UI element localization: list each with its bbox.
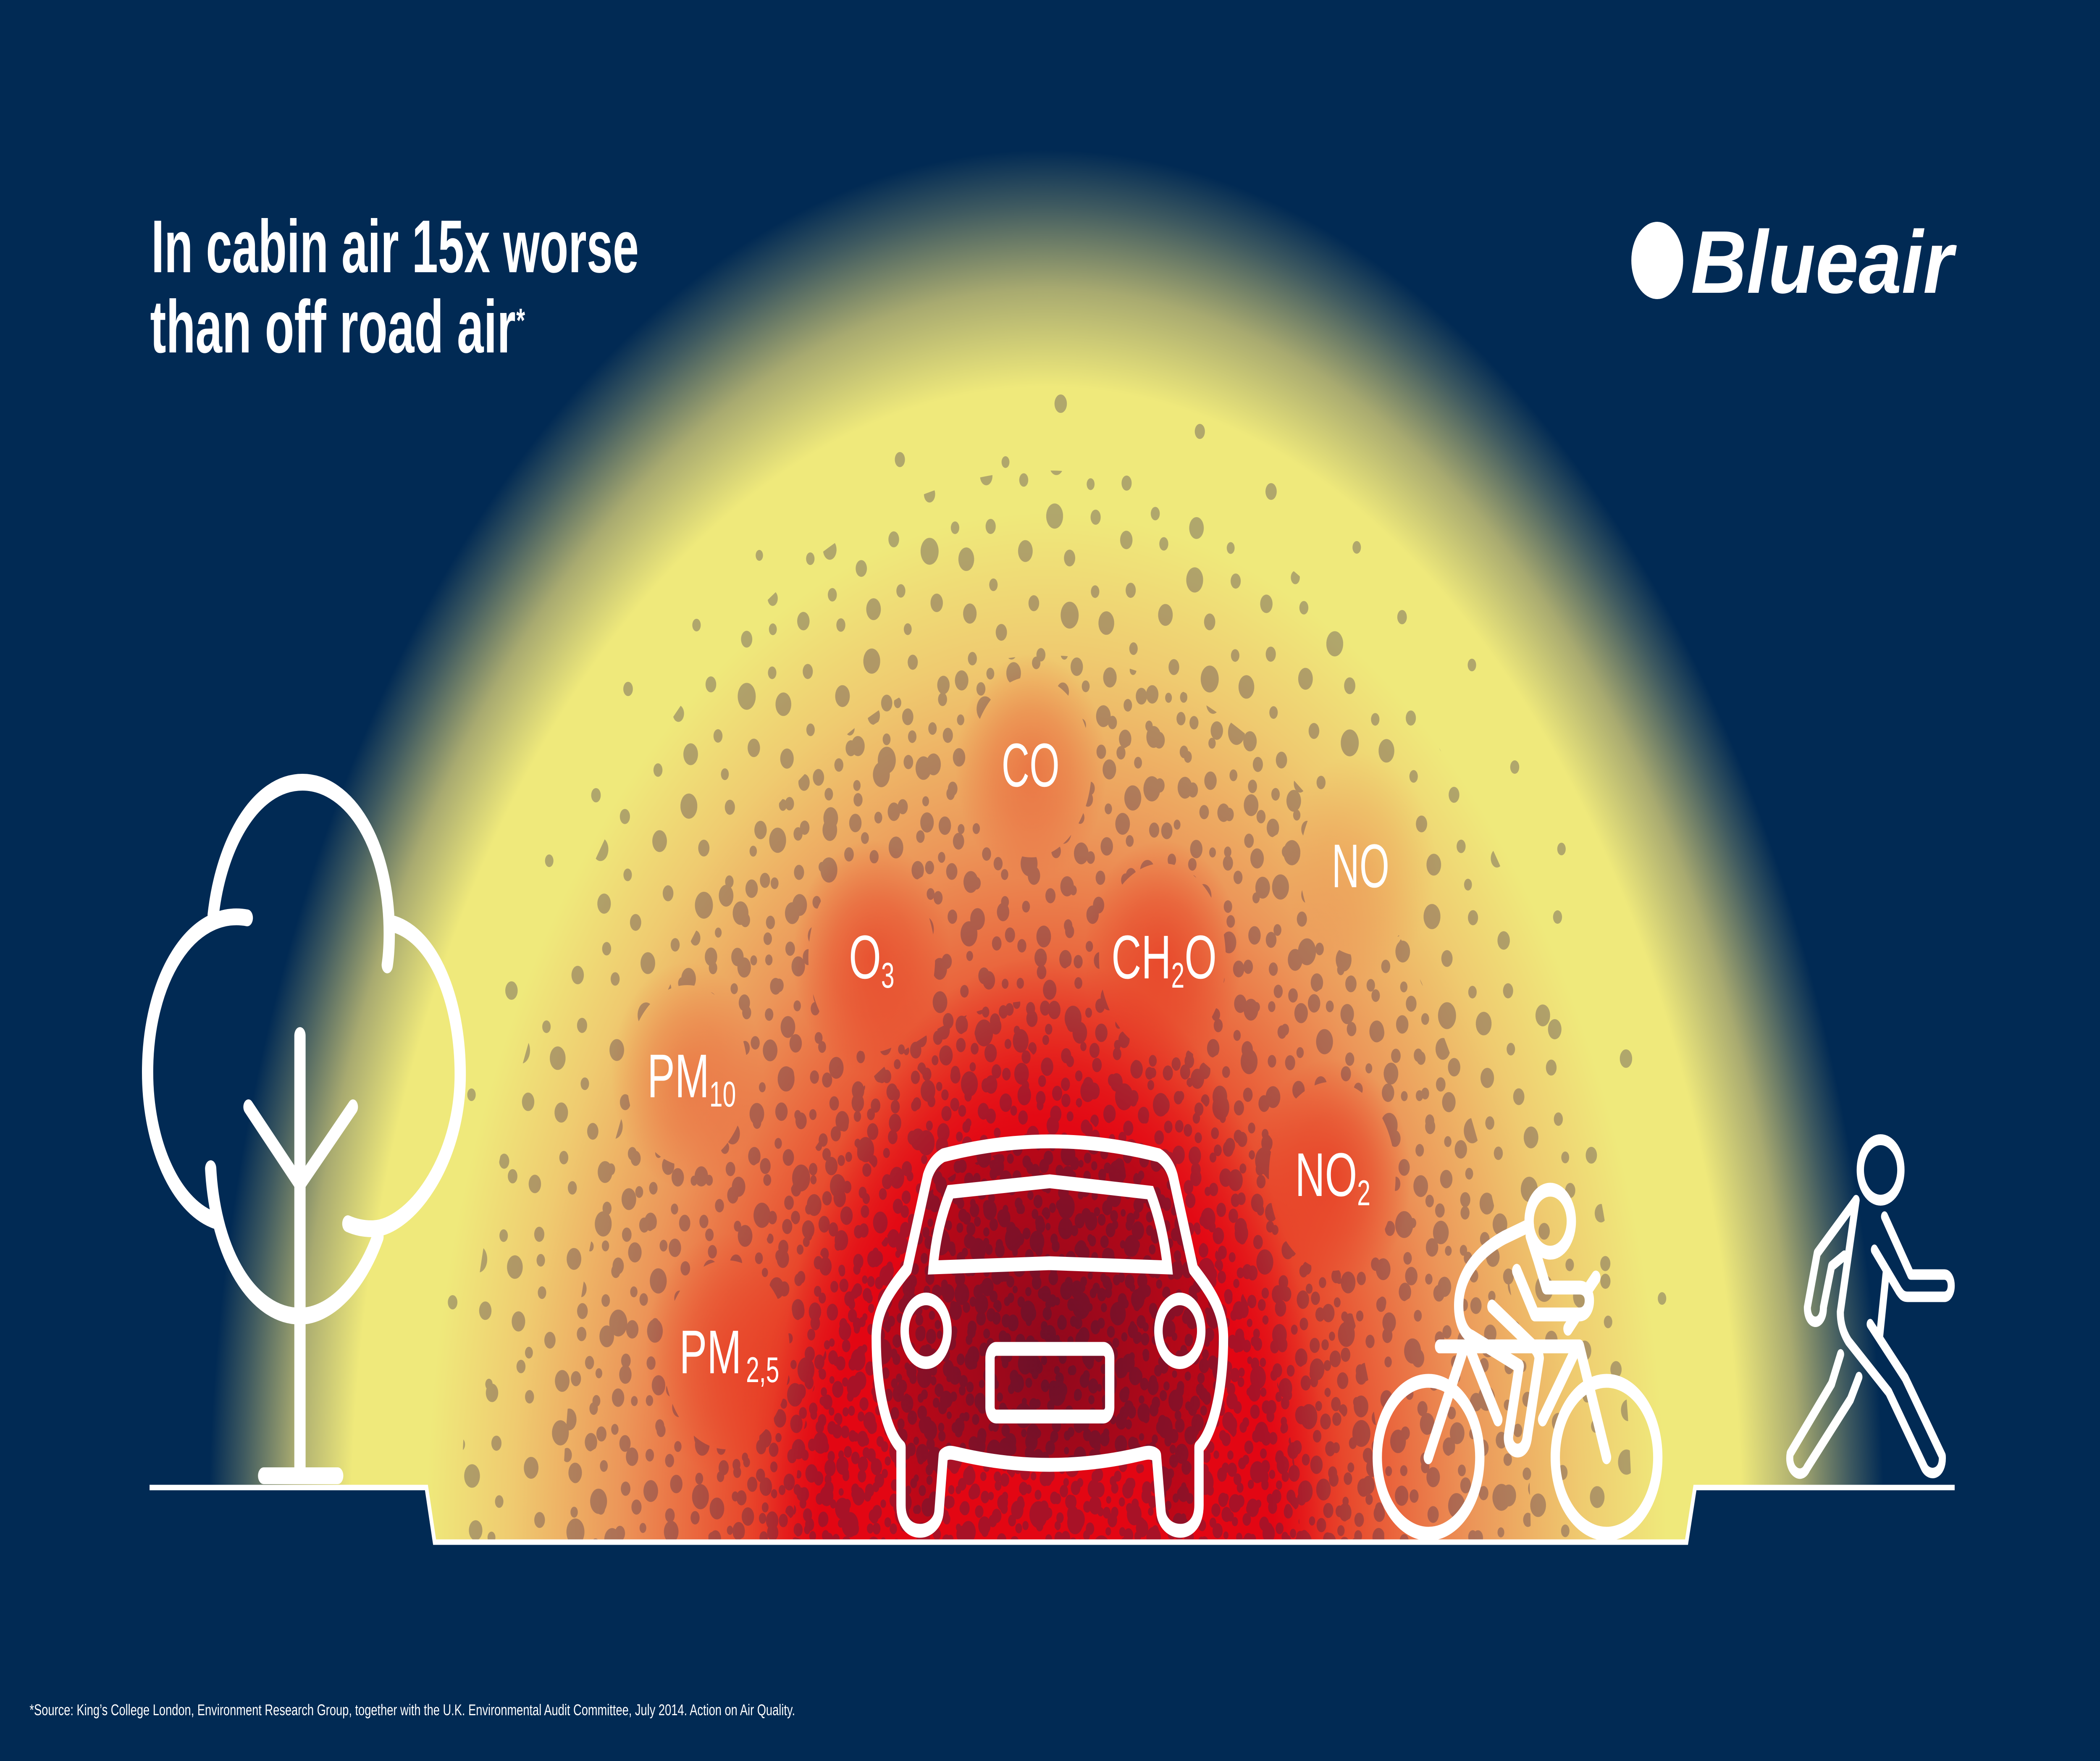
label: CO: CO <box>1002 731 1060 800</box>
rear leg <box>1790 1354 1859 1474</box>
title <box>150 205 639 369</box>
icon: pedestrian <box>1790 1140 1951 1474</box>
logo: Blueair <box>1631 213 1957 312</box>
label: PM10: 10 <box>709 1075 736 1114</box>
icon: cyclist <box>1377 1190 1658 1534</box>
label: NO2: NO <box>1295 1140 1357 1209</box>
label: NO: NO <box>1332 831 1389 901</box>
icon: tree <box>147 782 460 1476</box>
label: PM2,5: 2,5 <box>746 1350 779 1390</box>
label: O3: 3 <box>881 956 895 996</box>
car interior shade <box>876 1141 1223 1531</box>
head <box>1860 1140 1901 1200</box>
rider arm <box>1517 1236 1589 1314</box>
title: In cabin air 15x worse <box>151 205 639 289</box>
number plate <box>990 1349 1110 1417</box>
label: O3: O <box>849 923 881 992</box>
torso and front leg <box>1840 1200 1942 1473</box>
label: PM10: PM <box>647 1041 709 1111</box>
windshield <box>933 1181 1168 1267</box>
left headlight <box>905 1299 948 1363</box>
pollution particles <box>448 394 1666 1546</box>
label: CH2O: CH <box>1111 923 1171 992</box>
frame <box>1428 1346 1606 1457</box>
title: * <box>516 302 525 339</box>
title: than off road air <box>150 285 516 369</box>
rider head <box>1529 1190 1571 1253</box>
label: PM2,5: PM <box>679 1317 741 1387</box>
right headlight <box>1158 1299 1201 1363</box>
icon: car <box>876 1141 1223 1531</box>
rider body <box>1459 1225 1539 1451</box>
label: CH2O: O <box>1184 923 1217 992</box>
label: CH2O: 2 <box>1171 956 1184 996</box>
logo: Blueair: Blueair <box>1691 213 1957 312</box>
rear arm <box>1874 1217 1951 1297</box>
wheels <box>1377 1381 1480 1534</box>
footnote source: *Source: King’s College London, Environment Research Group, together with the U.K. Environmental Audit Committee, July 2014. Action on Air Quality. <box>29 1701 795 1719</box>
label: NO2: 2 <box>1357 1173 1370 1213</box>
front arm <box>1807 1200 1856 1322</box>
handlebar <box>1568 1277 1596 1329</box>
waist <box>1880 1272 1886 1335</box>
ground line <box>150 1488 1955 1542</box>
car body <box>876 1141 1223 1531</box>
pollution haze gradient dome <box>213 157 1879 1539</box>
